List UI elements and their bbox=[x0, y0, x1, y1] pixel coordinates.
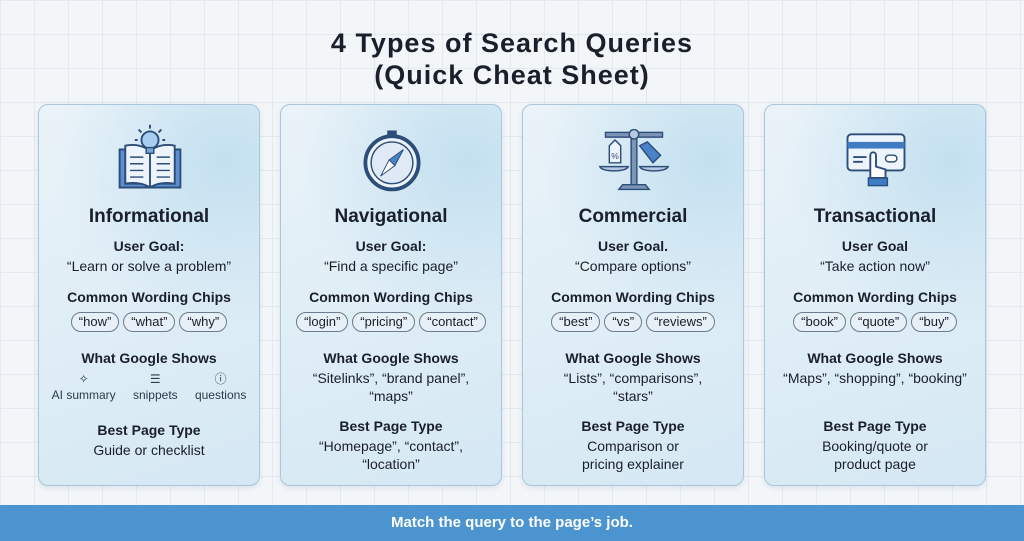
title: (Quick Cheat Sheet) bbox=[374, 60, 650, 90]
panel: navigational bbox=[280, 104, 502, 486]
google shows: “Sitelinks”, “brand panel”, bbox=[313, 370, 469, 386]
chips bbox=[71, 312, 227, 332]
heading: Informational bbox=[89, 206, 209, 227]
google shows bbox=[783, 350, 967, 386]
user goal: “Take action now” bbox=[820, 258, 930, 274]
google shows: What Google Shows bbox=[807, 350, 943, 366]
google features icons: ☰ bbox=[150, 372, 161, 386]
panel: commercial bbox=[522, 104, 744, 486]
user goal: User Goal: bbox=[356, 238, 426, 254]
user goal bbox=[324, 238, 458, 274]
heading: Navigational bbox=[334, 206, 447, 227]
google shows bbox=[313, 350, 469, 404]
user goal bbox=[67, 238, 231, 274]
chips bbox=[296, 312, 486, 332]
icon: compass bbox=[364, 130, 420, 192]
best page type: pricing explainer bbox=[582, 456, 684, 472]
best page type bbox=[93, 422, 205, 458]
title bbox=[331, 28, 693, 90]
user goal: “Compare options” bbox=[575, 258, 691, 274]
best page type: Comparison or bbox=[587, 438, 679, 454]
chips heading: Common Wording Chips bbox=[309, 289, 473, 305]
chips: “how” bbox=[79, 314, 111, 329]
best page type: Booking/quote or bbox=[822, 438, 928, 454]
chips bbox=[793, 312, 957, 332]
best page type: Guide or checklist bbox=[93, 442, 205, 458]
user goal: “Find a specific page” bbox=[324, 258, 458, 274]
best page type: Best Page Type bbox=[823, 418, 927, 434]
chips: “best” bbox=[559, 314, 592, 329]
chips bbox=[551, 312, 715, 332]
best page type: product page bbox=[834, 456, 916, 472]
google features icons: ✧ bbox=[79, 372, 89, 386]
panel: informational bbox=[38, 104, 260, 486]
chips heading: Common Wording Chips bbox=[793, 289, 957, 305]
chips: “vs” bbox=[612, 314, 634, 329]
footer banner: Match the query to the page’s job. bbox=[391, 514, 633, 531]
google shows: “maps” bbox=[369, 388, 413, 404]
google shows: What Google Shows bbox=[81, 350, 217, 366]
chips: “why” bbox=[187, 314, 219, 329]
chips: “buy” bbox=[919, 314, 949, 329]
best page type: “location” bbox=[362, 456, 420, 472]
chips heading: Common Wording Chips bbox=[551, 289, 715, 305]
user goal bbox=[820, 238, 930, 274]
chips heading: Common Wording Chips bbox=[67, 289, 231, 305]
user goal bbox=[575, 238, 691, 274]
chips: “pricing” bbox=[360, 314, 407, 329]
chips: “contact” bbox=[427, 314, 478, 329]
best page type bbox=[581, 418, 685, 472]
google shows: “stars” bbox=[613, 388, 653, 404]
best page type: Best Page Type bbox=[581, 418, 685, 434]
google features icons: snippets bbox=[133, 388, 178, 402]
chips: “quote” bbox=[858, 314, 899, 329]
chips: “book” bbox=[801, 314, 838, 329]
best page type: “Homepage”, “contact”, bbox=[319, 438, 463, 454]
footer banner bbox=[0, 505, 1024, 541]
chips: “login” bbox=[304, 314, 340, 329]
google features icons bbox=[52, 372, 246, 402]
best page type bbox=[319, 418, 463, 472]
best page type bbox=[822, 418, 928, 472]
user goal: User Goal: bbox=[114, 238, 184, 254]
google shows: “Maps”, “shopping”, “booking” bbox=[783, 370, 967, 386]
best page type: Best Page Type bbox=[339, 418, 443, 434]
chips: “reviews” bbox=[654, 314, 707, 329]
icon: card in hand bbox=[846, 133, 906, 186]
google features icons: questions bbox=[195, 388, 246, 402]
google shows: What Google Shows bbox=[565, 350, 701, 366]
google shows: “Lists”, “comparisons”, bbox=[564, 370, 702, 386]
chips: “what” bbox=[131, 314, 167, 329]
icon: scale bbox=[598, 128, 670, 190]
google features icons: AI summary bbox=[52, 388, 116, 402]
best page type: Best Page Type bbox=[97, 422, 201, 438]
user goal: User Goal. bbox=[598, 238, 668, 254]
user goal: “Learn or solve a problem” bbox=[67, 258, 231, 274]
heading: Commercial bbox=[579, 206, 687, 227]
panel: transactional bbox=[764, 104, 986, 486]
user goal: User Goal bbox=[842, 238, 908, 254]
google shows bbox=[564, 350, 702, 404]
google shows: What Google Shows bbox=[323, 350, 459, 366]
title: 4 Types of Search Queries bbox=[331, 28, 693, 58]
icon: scale: % bbox=[611, 151, 619, 161]
icon: book with bulb bbox=[118, 124, 182, 188]
google features icons: ⓘ bbox=[215, 372, 227, 386]
heading: Transactional bbox=[814, 206, 936, 227]
